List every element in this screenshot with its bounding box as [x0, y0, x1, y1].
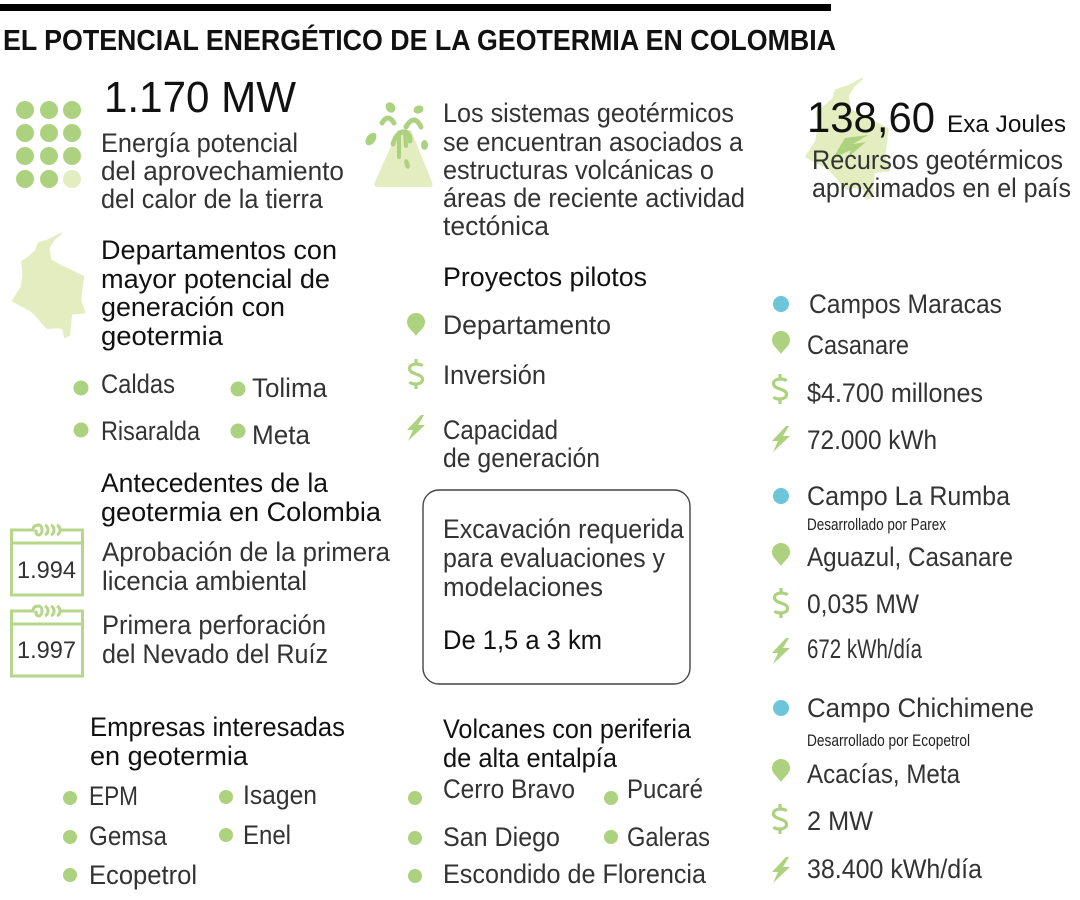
- stat: 138,60 Exa Joules: 138,60: [807, 94, 935, 142]
- text: 1997 milestone: Primera perforación: [102, 610, 326, 640]
- list: departments: Tolima: [252, 373, 327, 403]
- icon: calendar 1.997: [12, 605, 82, 676]
- text: geothermal systems: [443, 98, 745, 241]
- list: departments: [74, 369, 327, 450]
- department: [772, 330, 909, 360]
- heading: pilot projects: Proyectos pilotos: [443, 262, 647, 292]
- description: potential energy: [101, 128, 344, 214]
- heading: background: geotermia en Colombia: [101, 497, 381, 527]
- department: Aguazul, Casanare: [807, 542, 1013, 572]
- callout: excavation: De 1,5 a 3 km: [443, 625, 602, 655]
- list: companies: Isagen: [243, 780, 317, 810]
- list: volcanoes: Escondido de Florencia: [443, 859, 706, 889]
- heading: volcanoes: Volcanes con periferia: [443, 714, 691, 744]
- capacity: 72.000 kWh: [807, 425, 937, 455]
- capacity: 38.400 kWh/día: [807, 854, 982, 884]
- text: 1994 milestone: licencia ambiental: [102, 566, 307, 596]
- text: 1994 milestone: Aprobación de la primera: [102, 537, 390, 567]
- list: companies: Gemsa: [89, 821, 167, 851]
- project name: Campo Chichimene: [807, 693, 1034, 723]
- heading: departments: generación con: [101, 292, 285, 322]
- capacity: [772, 634, 922, 664]
- icon: volcano: [363, 100, 433, 187]
- icon: calendar 1.997: 1.997: [17, 637, 76, 664]
- list: companies: Ecopetrol: [89, 860, 197, 890]
- heading: companies: [90, 712, 345, 771]
- stat: 1.170 MW: 1.170 MW: [104, 73, 296, 122]
- project name: Campos Maracas: [809, 289, 1002, 319]
- stat: 138,60 Exa Joules: [807, 94, 1066, 142]
- icon: calendar 1.994: [12, 524, 82, 595]
- panel: departments: [13, 233, 337, 450]
- text: 1994 milestone: [102, 537, 390, 596]
- legend: investment: Inversión: [443, 360, 546, 390]
- panel: Campos Maracas: [772, 289, 1002, 455]
- list: departments: Caldas: [101, 369, 175, 399]
- capacity: 672 kWh/día: [807, 634, 922, 664]
- heading: companies: en geotermia: [90, 741, 248, 771]
- text: geothermal systems: se encuentran asociados a: [443, 127, 743, 157]
- stat: 138,60 Exa Joules: Exa Joules: [947, 111, 1066, 138]
- list: companies: EPM: [89, 781, 138, 811]
- callout: excavation: modelaciones: [443, 572, 603, 602]
- investment: 0,035 MW: [807, 589, 919, 619]
- panel: companies: [63, 712, 345, 890]
- title: EL POTENCIAL ENERGÉTICO DE LA GEOTERMIA EN COLOMBIA: [3, 23, 836, 57]
- description: potential energy: del calor de la tierra: [101, 184, 323, 214]
- panel: potential energy: [16, 73, 344, 214]
- text: geothermal systems: Los sistemas geotérmicos: [443, 98, 734, 128]
- heading: departments: mayor potencial de: [101, 264, 330, 294]
- panel: volcanoes: [408, 714, 710, 889]
- project name: Campo La Rumba: [807, 481, 1010, 511]
- icon: Colombia map: [13, 233, 85, 337]
- text: geothermal systems: áreas de reciente actividad: [443, 183, 745, 213]
- list: volcanoes: [408, 774, 710, 889]
- project name: [773, 693, 1034, 750]
- list: volcanoes: Pucaré: [627, 774, 703, 804]
- list: departments: Risaralda: [101, 416, 200, 446]
- panel: pilot projects legend: [407, 262, 647, 473]
- icon: Colombia map with bolt: [806, 79, 889, 199]
- text: geothermal systems: tectónica: [443, 211, 549, 241]
- legend: department: Departamento: [443, 310, 611, 340]
- description: potential energy: Energía potencial: [101, 128, 298, 158]
- project name: Desarrollado por Ecopetrol: [807, 732, 970, 750]
- description: resources: Recursos geotérmicos: [812, 145, 1063, 175]
- text: 1997 milestone: [102, 610, 328, 669]
- investment: $4.700 millones: [807, 378, 983, 408]
- description: potential energy: del aprovechamiento: [101, 156, 344, 186]
- description: resources: aproximados en el país: [812, 173, 1071, 203]
- heading: companies: Empresas interesadas: [90, 712, 345, 742]
- icon: calendar 1.994: 1.994: [17, 557, 76, 584]
- callout: excavation: Excavación requerida: [443, 514, 684, 544]
- panel: Campo Chichimene: [772, 693, 1034, 884]
- heading: volcanoes: de alta entalpía: [443, 743, 617, 773]
- legend: capacity: de generación: [443, 443, 600, 473]
- department: Casanare: [807, 330, 909, 360]
- department: Acacías, Meta: [807, 759, 960, 789]
- heading: departments: Departamentos con: [101, 235, 337, 265]
- list: companies: Enel: [243, 820, 291, 850]
- text: geothermal systems: estructuras volcánicas o: [443, 155, 714, 185]
- list: companies: [63, 780, 317, 890]
- panel: geothermal resources: [806, 79, 1071, 203]
- project name: Desarrollado por Parex: [807, 516, 947, 534]
- investment: [774, 804, 873, 836]
- legend: capacity: [407, 415, 600, 473]
- panel: Campo La Rumba: [772, 481, 1013, 664]
- list: volcanoes: San Diego: [443, 822, 560, 852]
- heading: background: [101, 468, 381, 527]
- list: volcanoes: Galeras: [627, 822, 710, 852]
- list: volcanoes: Cerro Bravo: [443, 774, 575, 804]
- text: 1997 milestone: del Nevado del Ruíz: [102, 639, 328, 669]
- investment: 2 MW: [807, 806, 873, 836]
- heading: volcanoes: [443, 714, 691, 773]
- callout: excavation: [423, 490, 690, 684]
- panel: background: [12, 468, 390, 676]
- top rule: [0, 4, 831, 11]
- icon: dot grid: [16, 101, 81, 188]
- heading: background: Antecedentes de la: [101, 468, 328, 498]
- panel: geothermal systems: [363, 98, 745, 241]
- description: resources: [812, 145, 1071, 203]
- project name: [773, 481, 1010, 534]
- heading: departments: [101, 235, 337, 351]
- callout: excavation: para evaluaciones y: [443, 543, 666, 573]
- list: departments: Meta: [252, 420, 310, 450]
- heading: departments: geotermia: [101, 321, 223, 351]
- legend: capacity: Capacidad: [443, 415, 558, 445]
